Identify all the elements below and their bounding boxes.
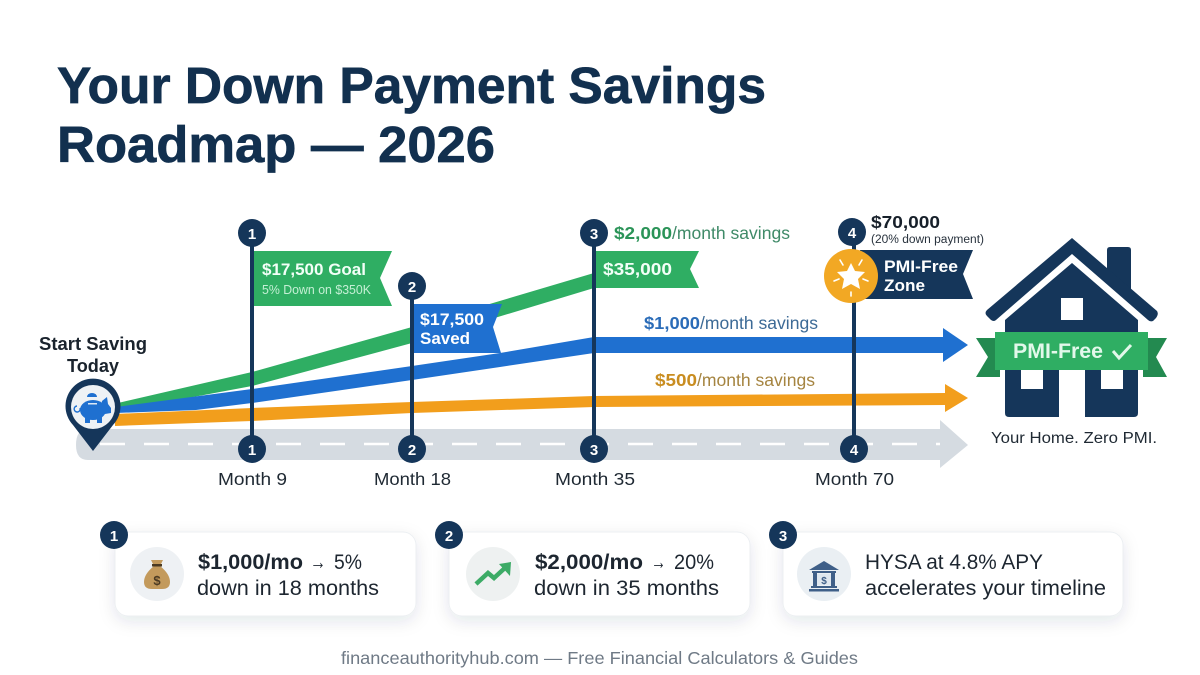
milestone 1 marker bbox=[238, 219, 266, 463]
footer: financeauthorityhub.com — Free Financial Calculators & Guides bbox=[341, 648, 858, 668]
flag 4: PMI-Free Zone: PMI-Free bbox=[884, 257, 958, 276]
milestone 1 marker: 1 bbox=[248, 226, 256, 243]
month labels: Month 18 bbox=[374, 469, 451, 489]
badge 1 bbox=[100, 521, 128, 549]
PMI-Free ribbon bbox=[976, 332, 1167, 377]
flag 2: saved: Saved bbox=[420, 329, 470, 348]
card 1: → bbox=[310, 550, 326, 574]
month labels bbox=[218, 469, 894, 489]
month labels: Month 35 bbox=[555, 469, 635, 489]
flag 4: PMI-Free Zone bbox=[860, 250, 973, 299]
card 2: $2,000/mo bbox=[535, 550, 643, 574]
milestone 3 marker bbox=[580, 219, 608, 463]
badge 3: 3 bbox=[779, 528, 787, 545]
start label: Start Saving bbox=[39, 333, 147, 354]
$2,000 series label: /month savings bbox=[672, 223, 790, 243]
milestone 1 marker: 1 bbox=[248, 442, 256, 459]
orange savings arrow bbox=[115, 384, 968, 426]
$1,000 series label: $1,000 bbox=[644, 313, 700, 333]
$500 series label: $500 bbox=[655, 370, 697, 390]
milestone 4 marker: 4 bbox=[850, 442, 859, 459]
$1,000 series label: /month savings bbox=[700, 313, 818, 333]
milestone 2 marker bbox=[398, 272, 426, 463]
milestone 3 marker: 3 bbox=[590, 226, 598, 243]
icon: bank bbox=[809, 561, 839, 592]
month labels: Month 9 bbox=[218, 469, 287, 489]
card 3: accelerates your timeline bbox=[865, 576, 1106, 600]
$500 series label: /month savings bbox=[697, 370, 815, 390]
title: Your Down Payment Savings bbox=[57, 57, 766, 114]
flag 3: $35,000: $35,000 bbox=[603, 259, 672, 279]
flag 4: PMI-Free Zone: Zone bbox=[884, 276, 925, 295]
PMI-Free ribbon: PMI-Free bbox=[1013, 340, 1103, 363]
card 1 bbox=[115, 532, 416, 616]
badge 2 bbox=[435, 521, 463, 549]
road timeline bbox=[76, 420, 968, 468]
$2,000 series label bbox=[614, 223, 790, 243]
$70,000 callout: (20% down payment) bbox=[871, 234, 984, 246]
milestone 4 marker bbox=[838, 218, 868, 463]
start label: Today bbox=[67, 355, 120, 376]
milestone 2 marker: 2 bbox=[408, 279, 416, 296]
start label bbox=[39, 333, 147, 376]
house icon bbox=[986, 238, 1158, 417]
icon: money bag: $ bbox=[153, 573, 161, 588]
card 2: 20% bbox=[674, 550, 714, 574]
card 2: down in 35 months bbox=[534, 576, 719, 600]
title: Roadmap — 2026 bbox=[57, 116, 495, 173]
icon: star badge bbox=[824, 249, 878, 303]
$70,000 callout: $70,000 bbox=[871, 212, 940, 232]
flag 2: saved bbox=[414, 304, 502, 353]
flag 1: goal: $17,500 Goal bbox=[262, 260, 366, 279]
badge 1: 1 bbox=[110, 528, 118, 545]
house caption: Your Home. Zero PMI. bbox=[991, 430, 1157, 447]
flag 2: saved: $17,500 bbox=[420, 310, 484, 329]
icon: bank: $ bbox=[821, 576, 827, 587]
card 3: HYSA at 4.8% APY bbox=[865, 550, 1043, 574]
month labels: Month 70 bbox=[815, 469, 894, 489]
card 1: $1,000/mo bbox=[198, 550, 303, 574]
milestone 3 marker: 3 bbox=[590, 442, 598, 459]
icon: trending arrow bbox=[476, 562, 511, 584]
green savings line bbox=[118, 273, 594, 411]
title bbox=[57, 57, 766, 173]
$2,000 series label: $2,000 bbox=[614, 223, 672, 243]
icon: money bag bbox=[144, 560, 170, 589]
badge 2: 2 bbox=[445, 528, 453, 545]
card 2 bbox=[449, 532, 750, 616]
flag 3: $35,000 bbox=[596, 251, 699, 288]
card 1: down in 18 months bbox=[197, 576, 379, 600]
blue savings arrow bbox=[116, 328, 968, 413]
badge 3 bbox=[769, 521, 797, 549]
milestone 2 marker: 2 bbox=[408, 442, 416, 459]
card 1: 5% bbox=[334, 550, 362, 574]
flag 1: goal bbox=[254, 251, 392, 306]
icon: piggy bank pin bbox=[65, 379, 120, 451]
$1,000 series label bbox=[644, 313, 818, 333]
card 2: → bbox=[651, 550, 666, 574]
milestone 4 marker: 4 bbox=[848, 225, 857, 242]
flag 1: goal: 5% Down on $350K bbox=[262, 283, 372, 297]
$70,000 callout bbox=[871, 212, 984, 246]
card 3 bbox=[783, 532, 1123, 616]
